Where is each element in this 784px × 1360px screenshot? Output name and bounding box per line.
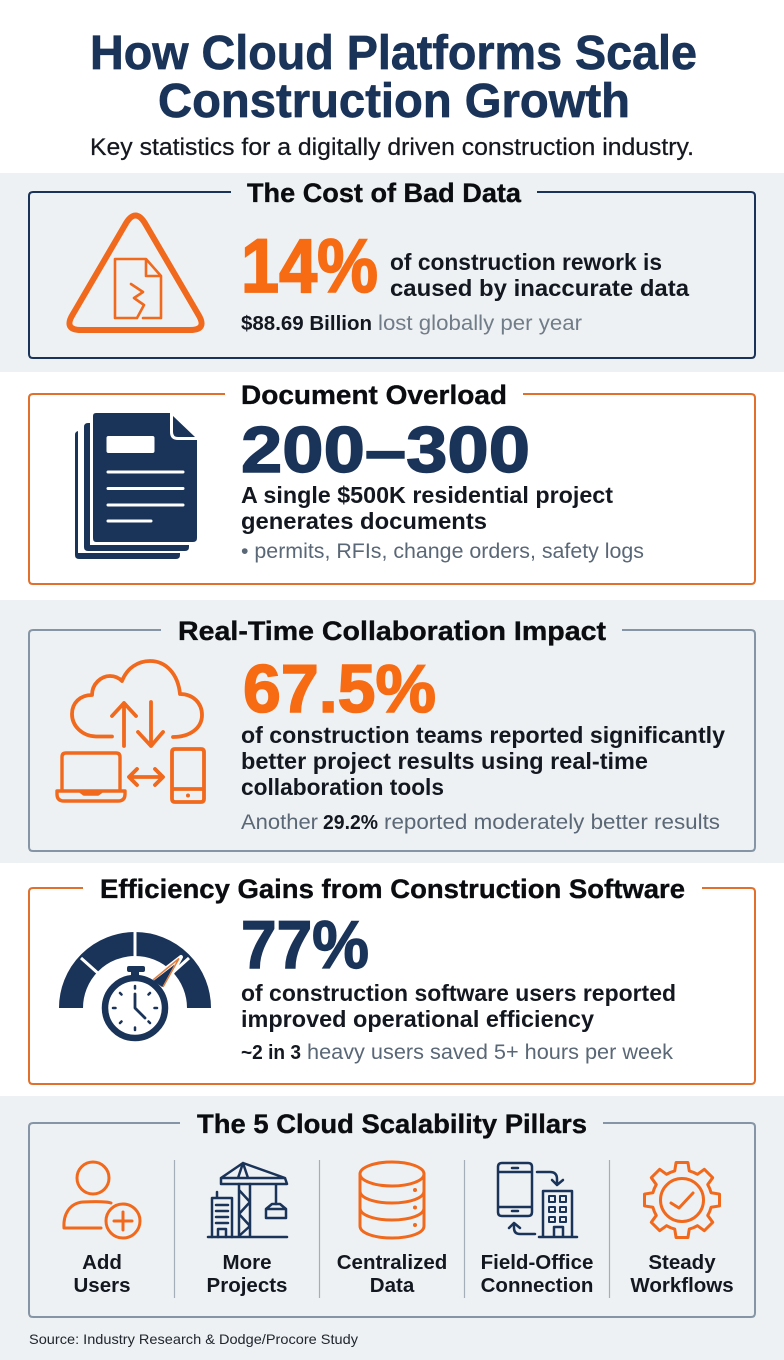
description: rework caused by inaccurate data: of construction rework is <box>390 249 662 275</box>
description: improved operational efficiency: improved operational efficiency <box>241 1006 594 1032</box>
detail: moderately better results <box>241 810 720 834</box>
label: steady workflows: Workflows <box>630 1274 734 1297</box>
description: residential project documents <box>241 482 613 534</box>
title: How Cloud Platforms Scale <box>90 27 697 80</box>
label: add users: Add <box>82 1251 122 1274</box>
description: improved operational efficiency <box>241 980 676 1032</box>
icon: tower crane and building <box>208 1163 287 1237</box>
description: teams reporting better results: collaboration tools <box>241 774 444 800</box>
icon: gauge with stopwatch <box>71 930 199 1038</box>
label: add users <box>74 1251 130 1297</box>
detail: billions lost <box>241 311 582 335</box>
detail: moderately better results: reported moderately better results <box>384 810 720 834</box>
label: add users: Users <box>74 1274 130 1297</box>
label: field-office connection: Field-Office <box>481 1251 593 1274</box>
pillar: field-office connection <box>481 1163 593 1297</box>
stat: 67.5%: 67.5% <box>243 651 436 727</box>
label: centralized data <box>337 1251 447 1297</box>
detail: hours saved: ~2 in 3 <box>241 1041 301 1064</box>
label: field-office connection <box>481 1251 593 1297</box>
description: teams reporting better results <box>241 722 725 800</box>
pillar: more projects <box>207 1163 287 1297</box>
heading: the cost of bad data: The Cost of Bad Data <box>247 178 521 208</box>
icon: warning triangle with broken document <box>69 216 202 330</box>
icon: user with plus <box>64 1162 140 1238</box>
stat: 77%: 77% <box>241 907 369 983</box>
label: more projects: More <box>223 1251 271 1274</box>
label: more projects <box>207 1251 287 1297</box>
detail: billions lost: $88.69 Billion <box>241 312 372 335</box>
icon: document stack <box>75 411 200 559</box>
description: teams reporting better results: of construction teams reported significantly <box>241 722 725 748</box>
detail: document types: • permits, RFIs, change orders, safety logs <box>241 539 644 563</box>
icon: database <box>360 1162 424 1238</box>
pillar: add users <box>64 1162 140 1297</box>
heading: the 5 cloud scalability pillars: The 5 Cloud Scalability Pillars <box>197 1109 587 1139</box>
source note: Source: Industry Research & Dodge/Procore Study <box>29 1331 358 1347</box>
label: steady workflows: Steady <box>648 1251 716 1274</box>
label: steady workflows <box>630 1251 734 1297</box>
description: rework caused by inaccurate data: caused by inaccurate data <box>390 275 690 301</box>
panel: the cost of bad data <box>29 178 755 358</box>
stat: 14%: 14% <box>241 224 378 309</box>
panel: efficiency gains <box>29 874 755 1084</box>
icon: cloud sync with devices <box>57 661 204 802</box>
icon: phone and office building <box>498 1163 577 1237</box>
description: improved operational efficiency: of construction software users reported <box>241 980 676 1006</box>
description: rework caused by inaccurate data <box>390 249 690 301</box>
description: teams reporting better results: better project results using real-time <box>241 748 648 774</box>
description: residential project documents: generates documents <box>241 508 487 534</box>
subtitle: Key statistics for a digitally driven construction industry. <box>90 134 694 161</box>
label: more projects: Projects <box>207 1274 287 1297</box>
heading: document overload: Document Overload <box>241 380 507 410</box>
heading: real-time collaboration impact: Real-Time Collaboration Impact <box>178 616 606 646</box>
label: centralized data: Data <box>370 1274 415 1297</box>
detail: hours saved: heavy users saved 5+ hours per week <box>307 1040 673 1064</box>
detail: billions lost: lost globally per year <box>378 311 582 335</box>
stat: 200-300: 200–300 <box>241 413 530 486</box>
title: Construction Growth <box>158 75 630 128</box>
description: residential project documents: A single $500K residential project <box>241 482 613 508</box>
pillar: steady workflows <box>630 1162 734 1297</box>
label: centralized data: Centralized <box>337 1251 447 1274</box>
panel: document overload <box>29 380 755 584</box>
detail: moderately better results: Another <box>241 810 318 834</box>
panel: the 5 cloud scalability pillars <box>29 1109 755 1317</box>
icon: gear with check mark <box>644 1162 720 1238</box>
panel: real-time collaboration impact <box>29 616 755 851</box>
label: field-office connection: Connection <box>481 1274 593 1297</box>
heading: efficiency gains from construction software: Efficiency Gains from Construction Software <box>100 874 685 904</box>
pillar: centralized data <box>337 1162 447 1297</box>
title <box>90 27 697 128</box>
detail: moderately better results: 29.2% <box>323 811 378 834</box>
